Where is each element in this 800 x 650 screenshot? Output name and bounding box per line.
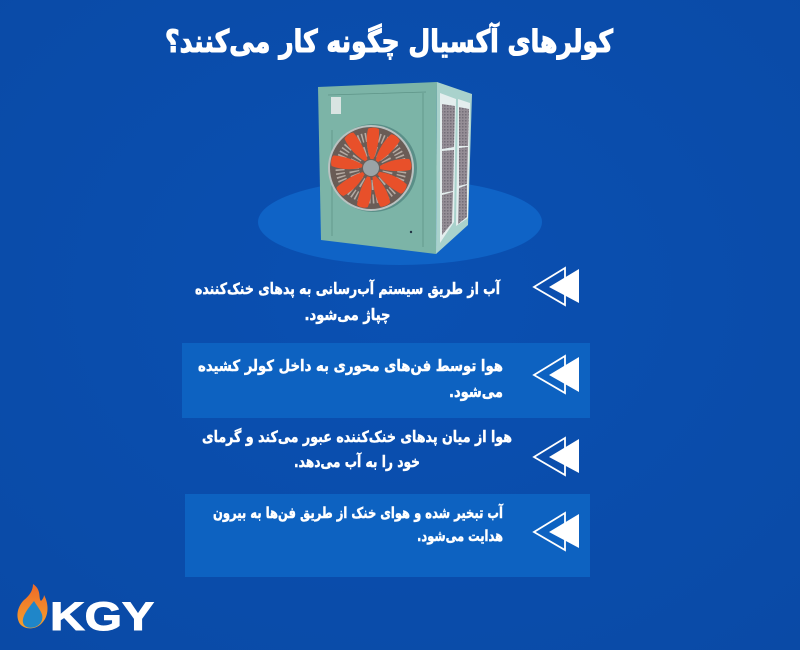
panel: step 2 background [182,343,590,418]
seams and screw [328,92,426,247]
step 4 text: آب تبخیر شده و هوای خنک از طریق فن‌ها به بیرون [213,504,504,522]
icon: step 1 arrows [534,268,579,305]
icon: step 3 arrows [534,438,579,475]
step 4 text [213,504,504,545]
wordmark: KGY [50,595,154,639]
step 4 text: هدایت می‌شود. [417,527,503,545]
step 2 text: هوا توسط فن‌های محوری به داخل کولر کشیده [198,357,503,375]
step 2 text [198,357,503,401]
side vents [440,93,470,243]
label plate [331,97,341,114]
fan blades [330,127,412,209]
logo [17,584,154,639]
step 3 text: هوا از میان پدهای خنک‌کننده عبور می‌کند و گرمای [202,427,512,447]
cooler side panel [436,82,472,254]
fan hub [363,160,379,176]
step 1 text [195,279,501,325]
title: کولرهای آکسیال چگونه کار می‌کنند؟ [165,22,614,60]
step 1 text: چپاژ می‌شود. [304,306,390,325]
axial fan [328,124,417,212]
step 3 text: خود را به آب می‌دهد. [294,452,420,471]
cooler front panel [318,82,437,254]
step 3 text [202,427,512,471]
step 1 text: آب از طریق سیستم آب‌رسانی به پدهای خنک‌کننده [195,279,501,299]
step 2 text: می‌شود. [449,383,503,401]
icon: step 4 arrows [534,513,579,550]
illustration: axial cooler [318,82,472,254]
icon: step 2 arrows [534,356,579,393]
platform ellipse [258,179,542,265]
panel: step 4 background [185,494,590,577]
icon: flame and drop [17,584,48,628]
